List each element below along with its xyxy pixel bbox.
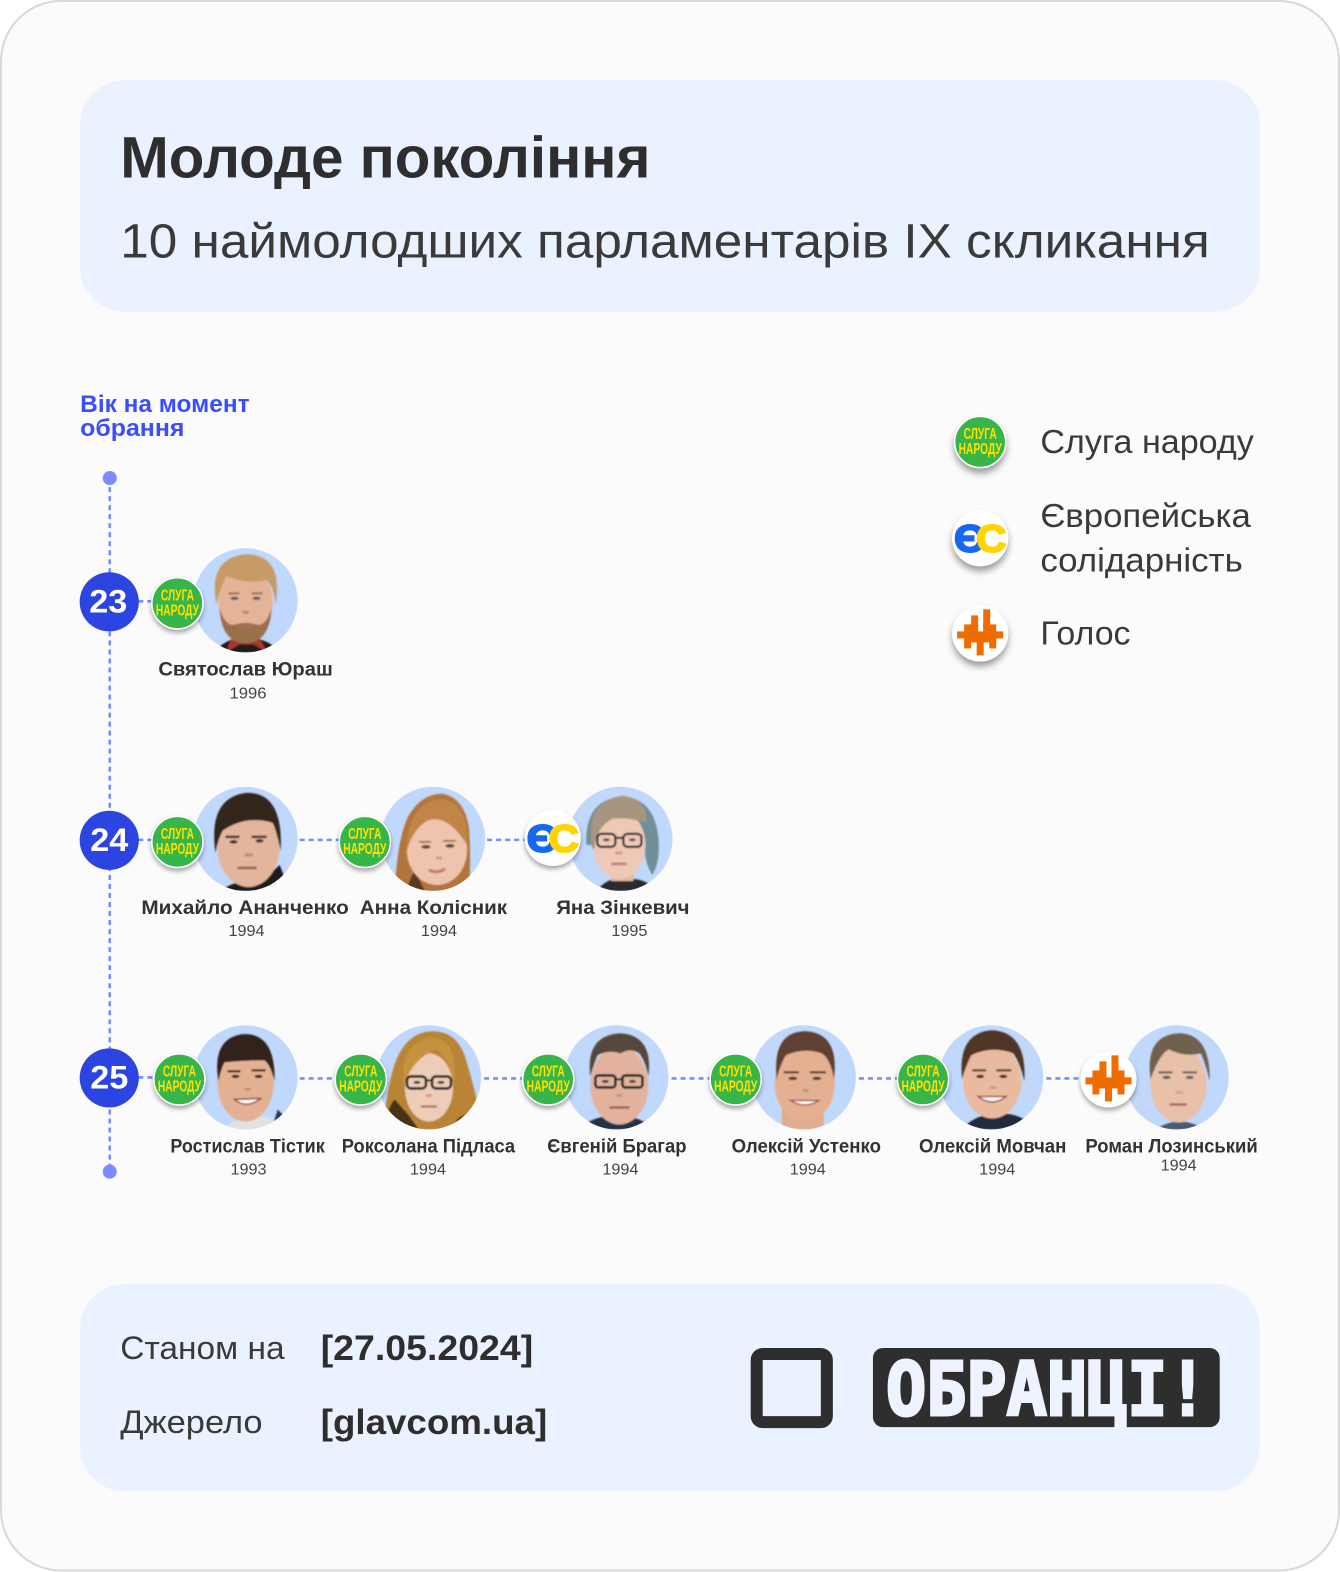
party badge: НАРОДУ <box>343 840 387 858</box>
logo: wordmark: ОБРАНЦІ! <box>886 1347 1208 1433</box>
legend item: Слуга народу: СЛУГА <box>964 425 997 443</box>
party badge <box>898 1054 949 1105</box>
portrait <box>752 1025 856 1130</box>
person: Ростислав Тістик <box>154 1025 325 1179</box>
person: Анна Колісник <box>339 787 508 940</box>
date value: [27.05.2024] <box>321 1329 533 1368</box>
party badge <box>154 1054 205 1105</box>
date label: Станом на <box>120 1330 285 1366</box>
party badge <box>339 816 390 867</box>
portrait <box>568 787 673 891</box>
portrait <box>377 1025 481 1130</box>
legend item: Голос: Голос <box>1040 615 1131 652</box>
source label: Джерело <box>120 1404 263 1440</box>
name: Олексій Устенко <box>732 1137 881 1158</box>
party badge: Є <box>527 818 557 860</box>
legend item: Голос <box>952 605 1131 661</box>
logo: square mark <box>757 1354 827 1422</box>
panel: footer <box>80 1284 1260 1491</box>
person: Яна Зінкевич <box>525 787 690 940</box>
portrait <box>1125 1025 1229 1130</box>
subtitle: 10 наймолодших парламентарів IX скликання <box>120 215 1210 269</box>
portrait <box>193 1025 298 1130</box>
party badge: НАРОДУ <box>156 840 200 858</box>
name: Михайло Ананченко <box>141 898 349 919</box>
legend item: Європейська солідарність: Європейська <box>1040 498 1251 535</box>
party badge <box>152 578 203 629</box>
name: Євгеній Брагар <box>547 1137 687 1158</box>
party badge: НАРОДУ <box>902 1077 945 1095</box>
portrait <box>193 787 298 891</box>
name: Яна Зінкевич <box>556 898 690 919</box>
age marker 23 <box>80 572 139 631</box>
name: Анна Колісник <box>360 898 508 919</box>
legend <box>952 416 1254 661</box>
birth year: 1994 <box>421 922 457 940</box>
party badge: СЛУГА <box>532 1062 565 1080</box>
person: Роман Лозинський <box>1080 1025 1258 1175</box>
party badge: СЛУГА <box>907 1062 940 1080</box>
party badge <box>335 1054 386 1105</box>
party badge: НАРОДУ <box>714 1077 758 1095</box>
person: Михайло Ананченко <box>141 787 349 940</box>
legend item: Європейська солідарність <box>952 498 1251 579</box>
source value: [glavcom.ua] <box>321 1403 547 1442</box>
party badge: СЛУГА <box>161 825 194 843</box>
party badge <box>710 1054 761 1105</box>
person: Олексій Мовчан <box>898 1025 1066 1179</box>
party badge: СЛУГА <box>161 586 194 604</box>
age marker 24: 24 <box>90 822 128 858</box>
party badge: НАРОДУ <box>158 1077 202 1095</box>
legend item: Слуга народу <box>955 416 1254 468</box>
party badge <box>1080 1051 1137 1107</box>
legend item: Слуга народу: Слуга народу <box>1040 424 1254 461</box>
birth year: 1994 <box>790 1161 826 1179</box>
party badge <box>525 810 581 866</box>
birth year: 1994 <box>979 1161 1015 1179</box>
party badge: С <box>549 818 579 860</box>
person: Євгеній Брагар <box>523 1025 687 1179</box>
timeline axis <box>103 471 1082 1179</box>
birth year: 1994 <box>1161 1157 1197 1175</box>
party badge: СЛУГА <box>348 825 382 843</box>
birth year: 1995 <box>611 922 648 940</box>
axis title: обрання <box>80 415 184 442</box>
birth year: 1994 <box>410 1161 446 1179</box>
portrait <box>381 787 485 891</box>
legend item: Європейська солідарність: С <box>976 519 1006 561</box>
name: Олексій Мовчан <box>919 1137 1066 1158</box>
person: Святослав Юраш <box>152 548 333 703</box>
portrait <box>193 548 298 652</box>
party badge <box>152 816 203 867</box>
name: Ростислав Тістик <box>170 1137 325 1158</box>
legend item: Європейська солідарність: солідарність <box>1040 542 1243 579</box>
portrait <box>564 1025 668 1130</box>
party badge: СЛУГА <box>344 1062 378 1080</box>
age marker 25 <box>80 1048 139 1107</box>
name: Роман Лозинський <box>1085 1137 1258 1158</box>
party badge: НАРОДУ <box>339 1077 383 1095</box>
panel: header <box>80 80 1260 312</box>
name: Святослав Юраш <box>158 660 333 681</box>
birth year: 1994 <box>229 922 265 940</box>
axis title <box>80 391 250 442</box>
party badge: НАРОДУ <box>527 1077 570 1095</box>
birth year: 1994 <box>602 1161 639 1179</box>
age marker 25: 25 <box>90 1059 128 1095</box>
birth year: 1993 <box>231 1161 267 1179</box>
name: Роксолана Підласа <box>342 1137 516 1158</box>
age marker 24 <box>80 811 139 870</box>
person: Олексій Устенко <box>710 1025 881 1179</box>
legend item: Слуга народу: НАРОДУ <box>959 440 1002 458</box>
portrait <box>939 1025 1043 1130</box>
legend item: Європейська солідарність: Є <box>954 519 984 561</box>
birth year: 1996 <box>230 685 267 703</box>
age marker 23: 23 <box>89 583 127 619</box>
title: Молоде покоління <box>120 125 650 190</box>
party badge: СЛУГА <box>719 1062 752 1080</box>
party badge <box>523 1054 574 1105</box>
person: Роксолана Підласа <box>335 1025 516 1179</box>
axis title: Вік на момент <box>80 391 250 418</box>
party badge: СЛУГА <box>163 1062 196 1080</box>
party badge: НАРОДУ <box>156 601 200 619</box>
